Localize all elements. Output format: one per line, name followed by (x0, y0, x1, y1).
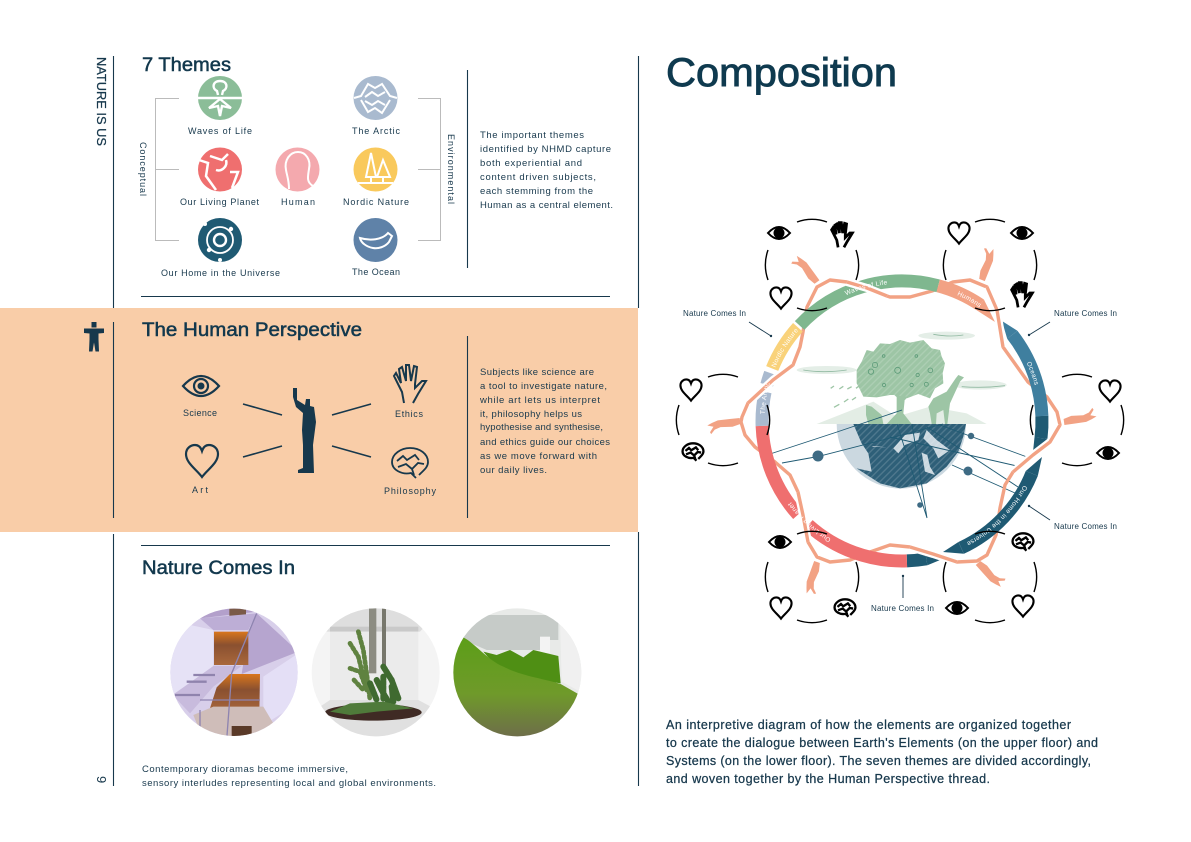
tree fruit (868, 355, 933, 387)
segment: Oceans (1002, 321, 1042, 416)
thread lines and planets (770, 410, 1027, 518)
diagram: human perspective (183, 365, 436, 496)
photo: wood and glass atrium (170, 608, 298, 736)
central illustration: tree over globe (797, 332, 1007, 489)
cluster: bottom left (765, 531, 859, 623)
planets (812, 433, 974, 508)
title: Composition: Composition (666, 51, 897, 95)
globe light patches (872, 430, 950, 475)
heading: 7 Themes: 7 Themes (142, 55, 231, 76)
text block: human perspective description: it, philosophy helps us (480, 409, 582, 420)
callouts: Nature Comes In: Nature Comes In (1054, 309, 1117, 318)
ribbon labels: Waves of Life (844, 280, 887, 295)
heading: The Human Perspective: The Human Perspective (142, 320, 362, 341)
text block: diagram caption: Systems (on the lower floor). The seven themes are divided accordingly, (666, 754, 1091, 768)
small animal (866, 405, 883, 424)
callouts: Nature Comes In: Nature Comes In (1054, 522, 1117, 531)
woven ribbon segments (762, 281, 1047, 565)
text block: diagram caption: and woven together by the Human Perspective thread. (666, 772, 990, 786)
text block: dioramas caption: Contemporary dioramas become immersive, (142, 764, 348, 775)
silhouette: standing person (293, 388, 316, 473)
icon: heart (186, 445, 218, 477)
ribbon labels: Nordic Nature (771, 329, 798, 368)
human thread: under ribbon (741, 280, 1060, 562)
label: Conceptual: Conceptual (138, 142, 148, 196)
icon: brain (392, 448, 428, 478)
globe continents (853, 424, 966, 488)
rain dashes (831, 385, 860, 407)
icon: eye (183, 376, 219, 396)
cluster: top left (765, 219, 859, 311)
cluster: top right (943, 219, 1037, 311)
text block: diagram caption: An interpretive diagram of how the elements are organized together (666, 718, 1071, 732)
vertical running head: NATURE IS US (94, 57, 109, 146)
segment: Our Home in the Universe (943, 457, 1042, 554)
segment: Waves of Life (800, 281, 938, 326)
label: Environmental: Environmental (446, 134, 456, 204)
cluster: right (1030, 374, 1124, 466)
label: Waves of Life: Waves of Life (188, 126, 252, 136)
ground (817, 402, 987, 424)
icon: Human (276, 148, 320, 192)
cluster: left (676, 374, 770, 466)
text block: themes description: identified by NHMD capture (480, 144, 611, 155)
label: Philosophy: Philosophy (384, 486, 436, 496)
cluster: bottom right (943, 531, 1037, 623)
text block: themes description: content driven subjects, (480, 172, 596, 183)
label: Our Home in the Universe: Our Home in the Universe (161, 268, 280, 278)
segment: The Arctic (762, 373, 770, 426)
text block: human perspective description: hypothesise and synthesise, (480, 422, 603, 433)
label: Our Living Planet: Our Living Planet (180, 197, 259, 207)
photo: tree installation in white room (310, 607, 443, 740)
text block: human perspective description: and ethics guide our choices (480, 437, 610, 448)
icon: Waves of Life (198, 76, 242, 120)
peach band: The Human Perspective (0, 308, 638, 532)
segment: Our Living Planet (762, 426, 907, 561)
human thread: over ribbon (748, 282, 1060, 562)
text block: themes description (480, 130, 613, 211)
text block: themes description: each stemming from the (480, 186, 593, 197)
segment: Nordic Nature (772, 327, 798, 368)
tree (857, 340, 945, 424)
text block: themes description: both experiential and (480, 158, 582, 169)
text block: dioramas caption: sensory interludes representing local and global environments. (142, 778, 436, 789)
tree hatch (857, 340, 945, 398)
ribbon labels (760, 280, 1038, 545)
text block: human perspective description: our daily lives. (480, 465, 547, 476)
icon: Our Home in the Universe (198, 218, 242, 262)
callouts: Nature Comes In (683, 309, 1117, 613)
giraffe (928, 375, 964, 424)
text block: diagram caption: to create the dialogue between Earth's Elements (on the upper floor) and (666, 736, 1098, 750)
icon: hand (394, 365, 426, 403)
icon: The Arctic (354, 76, 398, 120)
text block: themes description: Human as a central element. (480, 200, 613, 211)
clouds (797, 332, 1007, 390)
text block: human perspective description: Subjects like science are (480, 367, 594, 378)
label: Nordic Nature: Nordic Nature (343, 197, 409, 207)
label: Art: Art (192, 485, 208, 495)
heading: Nature Comes In: Nature Comes In (142, 558, 295, 579)
segment: Humans (938, 286, 995, 322)
globe ocean (837, 424, 966, 489)
icon: Our Living Planet (198, 148, 242, 192)
page number: 9 (94, 776, 109, 783)
callouts: Nature Comes In: Nature Comes In (683, 309, 746, 318)
text block: human perspective description: while art lets us interpret (479, 395, 600, 406)
globe hatch (853, 424, 966, 488)
segment: dark tip (907, 552, 945, 565)
icon: The Ocean (354, 218, 398, 262)
icon: Nordic Nature (354, 148, 398, 192)
ribbon labels: Our Home in the Universe (967, 486, 1027, 545)
panel: themes diagram (138, 76, 456, 278)
text block: human perspective description: as we move forward with (480, 451, 597, 462)
label: The Ocean: The Ocean (352, 267, 400, 277)
photo: moss landscape in a room (452, 607, 585, 740)
text block: human perspective description: a tool to investigate nature, (480, 381, 607, 392)
bracket: conceptual (155, 98, 179, 240)
text block: themes description: The important themes (480, 130, 584, 141)
text block: human perspective description (479, 367, 610, 476)
label: Ethics: Ethics (395, 409, 424, 419)
ribbon labels: Oceans (1027, 362, 1038, 385)
ribbon labels: Humans (958, 291, 981, 307)
callouts: Nature Comes In: Nature Comes In (871, 604, 934, 613)
segment: ocean dark end (1033, 416, 1047, 452)
ribbon labels: The Arctic (760, 382, 770, 414)
label: Human: Human (281, 197, 315, 207)
label: The Arctic: The Arctic (352, 126, 400, 136)
text block: dioramas caption (142, 764, 436, 789)
connecting lines (243, 404, 371, 457)
cloud lines (803, 334, 1005, 387)
layout rules (114, 56, 638, 786)
label: Science: Science (183, 408, 217, 418)
icon: human figure (84, 322, 104, 352)
ribbon labels: Our Living Planet (788, 502, 830, 542)
bracket: environmental (418, 98, 440, 240)
text block: diagram caption (666, 718, 1098, 786)
